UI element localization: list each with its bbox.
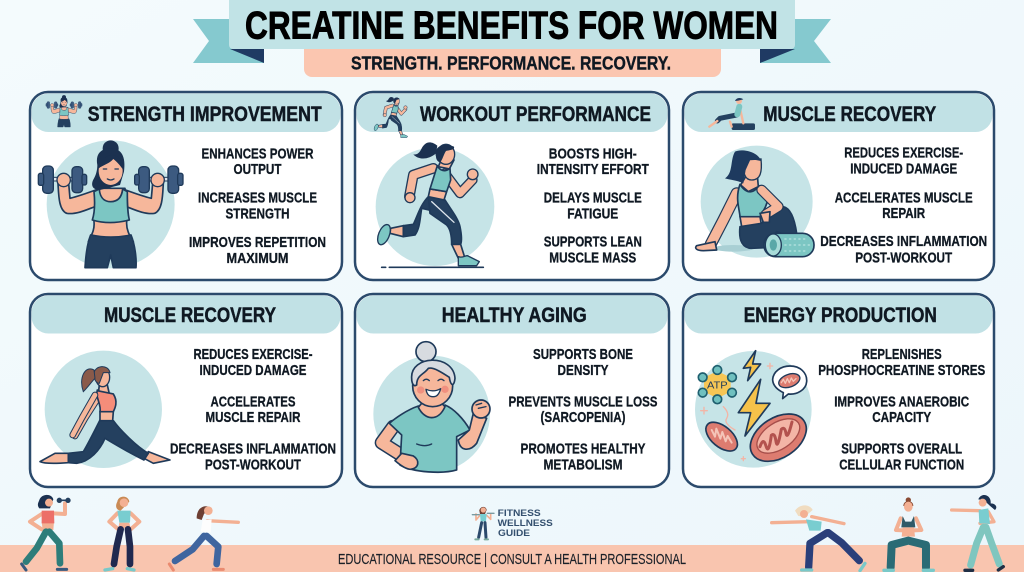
- list: recovery benefits: ACCELERATES: [210, 394, 296, 410]
- list: strength benefits: OUTPUT: [234, 162, 282, 178]
- subtitle banner: [304, 49, 721, 77]
- list: performance benefits: SUPPORTS LEAN: [544, 235, 642, 251]
- panel: muscle recovery (bottom): [30, 294, 342, 487]
- heading: energy production: ENERGY PRODUCTION: [744, 303, 937, 327]
- panel: muscle recovery (top): [683, 92, 994, 280]
- logo: fitness wellness guide: WELLNESS: [498, 518, 553, 529]
- footer band: [0, 545, 1024, 572]
- illustration: smiling older woman flexing: [373, 342, 490, 472]
- list: performance benefits: BOOSTS HIGH-: [549, 146, 637, 162]
- list: strength benefits: IMPROVES REPETITION: [189, 235, 326, 251]
- list: strength benefits: INCREASES MUSCLE: [198, 191, 317, 207]
- icon: logo figure: [472, 507, 494, 539]
- title: CREATINE BENEFITS FOR WOMEN: [245, 4, 778, 48]
- illustration: ATP, lightning and mitochondria: [695, 351, 815, 471]
- logo: fitness wellness guide: FITNESS: [498, 508, 541, 519]
- list: aging benefits: (SARCOPENIA): [540, 410, 626, 426]
- list: recovery benefits: [170, 347, 336, 473]
- list: energy benefits: CAPACITY: [872, 410, 931, 426]
- list: recovery benefits: ACCELERATES MUSCLE: [835, 190, 973, 206]
- footer figures: left group: [22, 495, 238, 570]
- figure: woman curling dumbbell: [22, 495, 71, 570]
- panel: workout performance: [355, 92, 669, 280]
- list: recovery benefits: DECREASES INFLAMMATION: [820, 234, 987, 250]
- panel: strength improvement: [30, 92, 342, 280]
- heading: muscle recovery: MUSCLE RECOVERY: [104, 303, 276, 327]
- header icon: stretch on block: [709, 98, 755, 130]
- list: energy benefits: PHOSPHOCREATINE STORES: [818, 363, 985, 379]
- list: energy benefits: IMPROVES ANAEROBIC: [834, 394, 970, 410]
- list: aging benefits: PROMOTES HEALTHY: [520, 441, 646, 457]
- illustration: woman lifting dumbbells: [38, 95, 183, 268]
- list: aging benefits: SUPPORTS BONE: [533, 347, 633, 363]
- list: recovery benefits: MUSCLE REPAIR: [206, 410, 301, 426]
- footer disclaimer: EDUCATIONAL RESOURCE | CONSULT A HEALTH PROFESSIONAL: [338, 551, 686, 568]
- footer figures: right group: [772, 495, 1003, 571]
- list: recovery benefits: REPAIR: [882, 206, 926, 222]
- icon: speech bubble with mitochondrion: [773, 366, 807, 399]
- list: aging benefits: [508, 347, 658, 473]
- list: aging benefits: METABOLISM: [544, 457, 622, 473]
- heading: healthy aging: HEALTHY AGING: [442, 303, 587, 327]
- list: strength benefits: MAXIMUM: [226, 251, 288, 267]
- illustration: woman in lunge stretch: [40, 351, 170, 468]
- list: performance benefits: FATIGUE: [567, 206, 619, 222]
- list: strength benefits: ENHANCES POWER: [202, 146, 314, 162]
- heading: workout performance: WORKOUT PERFORMANCE: [420, 102, 651, 126]
- list: recovery benefits: POST-WORKOUT: [855, 250, 952, 266]
- list: performance benefits: MUSCLE MASS: [549, 251, 637, 267]
- panel: healthy aging: [355, 294, 669, 487]
- list: performance benefits: [537, 146, 649, 267]
- heading: strength improvement: STRENGTH IMPROVEMENT: [88, 102, 322, 126]
- title ribbon: [193, 0, 831, 63]
- list: energy benefits: REPLENISHES: [862, 347, 942, 363]
- icon: ATP molecule: ATP: [707, 381, 728, 392]
- figure: woman lunging forward: [169, 506, 238, 570]
- list: recovery benefits: [820, 146, 987, 266]
- list: aging benefits: PREVENTS MUSCLE LOSS: [508, 394, 658, 410]
- figure: woman in squat: [884, 497, 933, 570]
- list: energy benefits: CELLULAR FUNCTION: [839, 457, 964, 473]
- header icon: runner: [373, 97, 408, 138]
- list: recovery benefits: INDUCED DAMAGE: [200, 363, 307, 379]
- panel: energy production: [683, 294, 994, 487]
- list: performance benefits: INTENSITY EFFORT: [537, 162, 649, 178]
- list: recovery benefits: REDUCES EXERCISE-: [194, 347, 313, 363]
- list: energy benefits: [818, 347, 985, 473]
- illustration: woman running: [373, 97, 494, 267]
- list: recovery benefits: DECREASES INFLAMMATION: [170, 441, 336, 457]
- list: recovery benefits: POST-WORKOUT: [205, 457, 301, 473]
- illustration: woman with foam roller: [696, 98, 814, 258]
- list: performance benefits: DELAYS MUSCLE: [544, 191, 642, 207]
- list: strength benefits: [189, 146, 326, 267]
- logo: fitness wellness guide: GUIDE: [498, 528, 530, 539]
- list: aging benefits: DENSITY: [558, 363, 609, 379]
- figure: woman in side lunge: [772, 505, 865, 571]
- heading: muscle recovery: MUSCLE RECOVERY: [763, 102, 936, 126]
- subtitle banner: STRENGTH. PERFORMANCE. RECOVERY.: [351, 52, 671, 74]
- list: recovery benefits: INDUCED DAMAGE: [850, 161, 957, 177]
- list: recovery benefits: REDUCES EXERCISE-: [844, 146, 963, 162]
- list: energy benefits: SUPPORTS OVERALL: [841, 441, 962, 457]
- figure: woman pointing: [952, 495, 1003, 570]
- header icon: lifter: [46, 95, 82, 127]
- logo: fitness wellness guide: [472, 507, 553, 539]
- icon: mitochondria: [701, 404, 815, 471]
- icon: lightning bolts: [738, 351, 770, 436]
- figure: woman hands on hips: [105, 497, 139, 570]
- list: strength benefits: STRENGTH: [226, 206, 290, 222]
